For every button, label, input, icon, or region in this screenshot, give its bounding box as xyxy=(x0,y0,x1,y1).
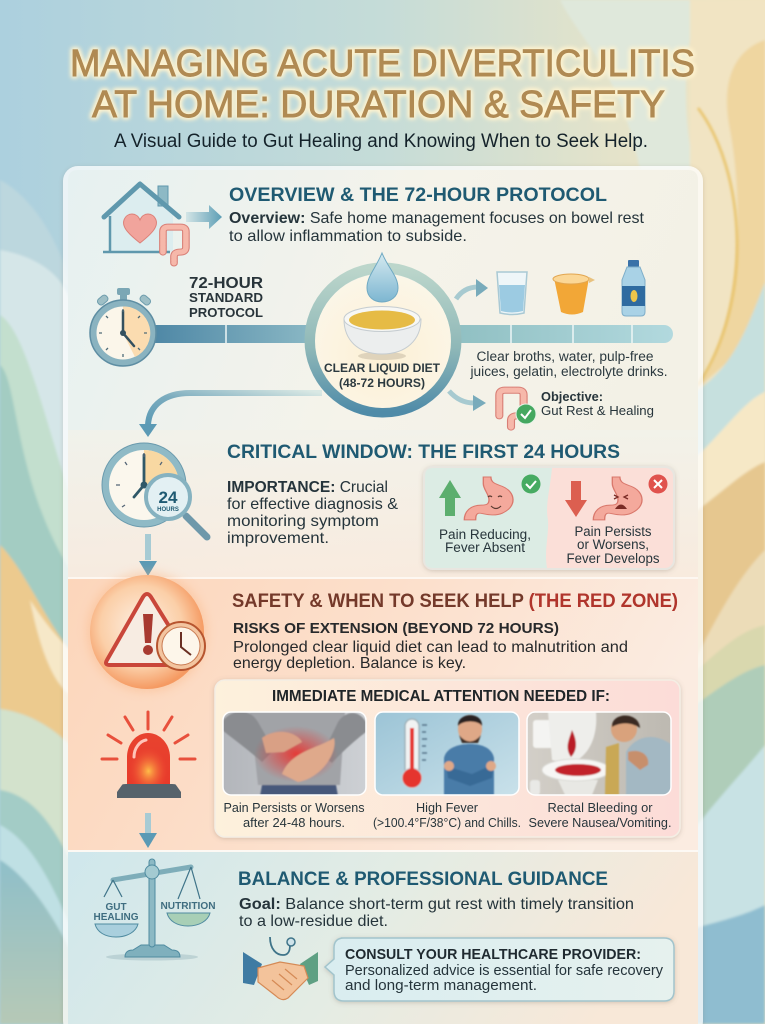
photo captions: High Fever xyxy=(416,800,479,815)
overview text xyxy=(229,210,645,245)
panel: overview xyxy=(103,184,645,263)
title: AT HOME: DURATION & SAFETY xyxy=(92,84,665,126)
risks text: energy depletion. Balance is key. xyxy=(233,655,466,672)
photo: high fever xyxy=(375,712,519,795)
objective text: Gut Rest & Healing xyxy=(541,403,654,418)
objective text xyxy=(541,389,654,418)
curved arrow down xyxy=(139,393,322,437)
importance text: monitoring symptom xyxy=(227,513,379,530)
photo captions: Rectal Bleeding or xyxy=(548,800,653,815)
goal text xyxy=(239,896,634,930)
worsening caption: Fever Develops xyxy=(566,551,660,566)
heading: OVERVIEW & THE 72-HOUR PROTOCOL xyxy=(229,185,607,206)
center: clear liquid diet xyxy=(310,253,456,412)
callout: Personalized advice is essential for safe recovery xyxy=(345,962,663,979)
improving caption xyxy=(439,527,531,555)
worsening caption: Pain Persists xyxy=(574,524,652,539)
importance text: improvement. xyxy=(227,530,329,547)
icon: balance scale: GUT xyxy=(105,902,127,913)
photo: bleeding and vomiting xyxy=(527,712,672,795)
label: 72-hour standard protocol xyxy=(189,275,263,320)
photo captions: (>100.4°F/38°C) and Chills. xyxy=(373,815,521,830)
icon: stopwatch xyxy=(90,288,156,366)
photo captions xyxy=(224,800,672,830)
label: 72-hour standard protocol: PROTOCOL xyxy=(189,305,263,320)
cross badge xyxy=(648,474,668,494)
callout xyxy=(325,938,674,1001)
icon: clock with magnifier xyxy=(102,443,207,537)
icon: warning triangle with clock xyxy=(87,572,207,692)
goal text: Goal: Balance short-term gut rest with timely transition xyxy=(239,896,634,913)
overview text: Overview: Safe home management focuses on bowel rest xyxy=(229,210,645,227)
icon: gelatin cup xyxy=(553,274,595,314)
label: 72-hour standard protocol: STANDARD xyxy=(189,290,263,305)
worsening caption: or Worsens, xyxy=(577,537,649,552)
icon: clock with magnifier: HOURS xyxy=(157,507,179,513)
heading: BALANCE & PROFESSIONAL GUIDANCE xyxy=(238,869,608,890)
subtitle: A Visual Guide to Gut Healing and Knowing When to Seek Help. xyxy=(114,131,648,152)
icon: glass of water xyxy=(497,272,527,314)
photo: abdominal pain xyxy=(222,712,366,796)
drinks caption xyxy=(469,349,668,379)
worsening: distressed stomach xyxy=(593,477,642,520)
risks text xyxy=(233,620,628,672)
icon: house with heart and colon xyxy=(103,184,186,263)
center: clear liquid diet: (48-72 HOURS) xyxy=(339,376,425,390)
worsening caption xyxy=(566,524,660,566)
arrow down xyxy=(139,534,157,576)
panel: immediate medical attention xyxy=(215,680,680,837)
arrow to objective xyxy=(449,391,486,411)
attention heading: IMMEDIATE MEDICAL ATTENTION NEEDED IF: xyxy=(272,688,610,705)
icon: colon with check xyxy=(499,390,536,427)
icon: electrolyte bottle xyxy=(622,260,645,316)
panel: balance and guidance xyxy=(68,851,698,1024)
main card xyxy=(63,166,703,1024)
timeline bar xyxy=(155,325,673,343)
title: MANAGING ACUTE DIVERTICULITIS xyxy=(70,43,695,85)
photo captions: Pain Persists or Worsens xyxy=(224,800,365,815)
panel: red zone xyxy=(68,572,698,852)
label: 72-hour standard protocol: 72-HOUR xyxy=(189,275,263,292)
title xyxy=(70,43,695,126)
worsening: down arrow xyxy=(565,481,587,517)
drinks caption: juices, gelatin, electrolyte drinks. xyxy=(469,364,668,379)
center: clear liquid diet: CLEAR LIQUID DIET xyxy=(324,361,441,375)
callout: and long-term management. xyxy=(345,977,537,994)
icon: water drop xyxy=(367,253,398,302)
arrow to drinks xyxy=(456,279,488,299)
icon: balance scale xyxy=(94,859,216,960)
icon: broth bowl xyxy=(344,306,421,360)
risks text: RISKS OF EXTENSION (BEYOND 72 HOURS) xyxy=(233,620,559,637)
goal text: to a low-residue diet. xyxy=(239,913,388,930)
photo captions: after 24-48 hours. xyxy=(243,815,345,830)
objective text: Objective: xyxy=(541,389,603,404)
icon: handshake with stethoscope xyxy=(243,937,318,1000)
overview text: to allow inflammation to subside. xyxy=(229,228,467,245)
check badge xyxy=(522,474,540,494)
panel: 72-hour timeline xyxy=(90,253,673,437)
improving caption: Pain Reducing, xyxy=(439,527,531,542)
icon: clock with magnifier: 24 xyxy=(159,488,178,507)
improving: up arrow xyxy=(439,480,461,516)
importance text xyxy=(227,479,398,547)
photo captions: Severe Nausea/Vomiting. xyxy=(528,815,672,830)
arrow xyxy=(186,205,222,229)
drinks caption: Clear broths, water, pulp-free xyxy=(476,349,654,364)
improving caption: Fever Absent xyxy=(445,540,525,555)
symptom comparison panel xyxy=(424,467,674,569)
arrow down xyxy=(139,813,157,848)
icon: balance scale: HEALING xyxy=(94,912,139,923)
importance text: for effective diagnosis & xyxy=(227,496,398,513)
callout: CONSULT YOUR HEALTHCARE PROVIDER: xyxy=(345,946,641,963)
panel: critical window xyxy=(102,442,674,576)
icon: siren xyxy=(102,712,195,798)
importance text: IMPORTANCE: Crucial xyxy=(227,479,388,496)
heading: CRITICAL WINDOW: THE FIRST 24 HOURS xyxy=(227,442,620,463)
risks text: Prolonged clear liquid diet can lead to malnutrition and xyxy=(233,639,628,656)
icon: balance scale: NUTRITION xyxy=(160,901,216,912)
improving: happy stomach xyxy=(464,477,513,520)
heading: SAFETY & WHEN TO SEEK HELP (THE RED ZONE) xyxy=(232,591,678,612)
